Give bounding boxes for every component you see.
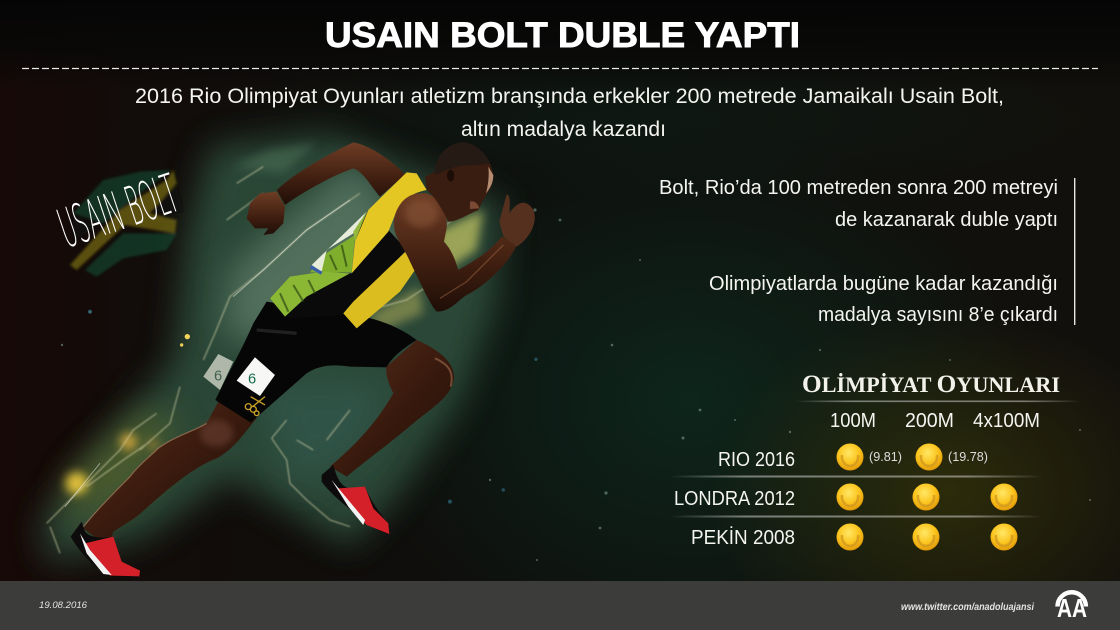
row: Londra 2012: LONDRA 2012	[674, 488, 795, 510]
head	[425, 142, 493, 222]
twitter address: www.twitter.com/anadoluajansi	[901, 601, 1035, 613]
column headers: 4x100M	[973, 410, 1040, 432]
front arm and fist	[394, 193, 535, 312]
title: USAIN BOLT DUBLE YAPTI	[325, 16, 800, 55]
row: Rio 2016: RIO 2016	[718, 449, 795, 471]
row: Rio 2016: (19.78)	[948, 450, 988, 464]
subtitle: altın madalya kazandı	[461, 118, 666, 141]
back arm	[247, 142, 405, 235]
row: Pekin 2008	[691, 524, 1018, 550]
Jamaican flag brush and athlete name: USAIN BOLT	[50, 161, 186, 260]
back leg and shoe	[71, 402, 257, 577]
row: Rio 2016: (9.81)	[869, 450, 902, 464]
icon: Anadolu Agency logo: AA	[1057, 593, 1087, 623]
column headers: 100M	[830, 410, 876, 432]
medal table	[670, 371, 1080, 550]
subtitle: 2016 Rio Olimpiyat Oyunları atletizm branşında erkekler 200 metrede Jamaikalı Usain Bolt,	[135, 85, 1004, 108]
race number bibs: 6	[214, 369, 222, 385]
column headers: 200M	[905, 410, 954, 432]
table heading: OLİMPİYAT OYUNLARI	[802, 371, 1060, 398]
vertical divider	[1074, 178, 1075, 325]
date: 19.08.2016	[39, 600, 88, 611]
key facts text block: de kazanarak duble yaptı	[835, 209, 1058, 231]
front leg and shoe	[322, 340, 454, 534]
torso and singlet	[270, 172, 427, 328]
row: Londra 2012	[674, 484, 1018, 510]
key facts text block: Olimpiyatlarda bugüne kadar kazandığı	[709, 273, 1058, 295]
subtitle	[135, 85, 1004, 141]
key facts text block: Bolt, Rio’da 100 metreden sonra 200 metreyi	[659, 177, 1058, 199]
row: Pekin 2008: PEKİN 2008	[691, 526, 795, 549]
row: Rio 2016	[718, 444, 988, 471]
energy burst behind the runner	[40, 133, 538, 563]
shorts logo	[245, 397, 265, 416]
shorts	[215, 302, 417, 423]
footer bar	[0, 581, 1120, 630]
race number bibs: 6	[248, 371, 256, 387]
column headers	[830, 410, 1040, 432]
key facts text block	[659, 177, 1058, 326]
race number bibs	[203, 354, 275, 396]
key facts text block: madalya sayısını 8’e çıkardı	[818, 304, 1058, 326]
dashed title divider	[22, 68, 1098, 70]
runner: Usain Bolt sprinting	[71, 142, 535, 577]
